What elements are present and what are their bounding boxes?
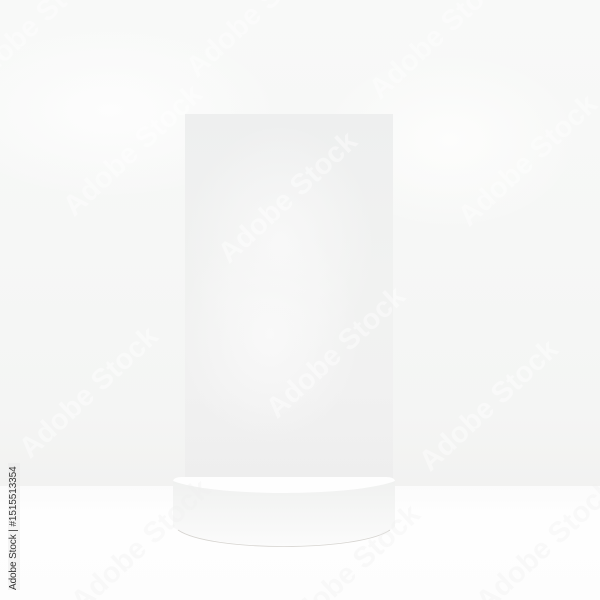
watermarks: Adobe Stock [212, 125, 364, 270]
stock id caption: Adobe Stock | #1515513354 [8, 466, 19, 590]
watermarks: Adobe Stock [413, 333, 565, 478]
watermarks: Adobe Stock [57, 78, 209, 223]
podium side [173, 481, 395, 546]
watermarks: Adobe Stock [260, 280, 412, 425]
floor [0, 486, 600, 600]
watermarks: Adobe Stock [452, 88, 600, 233]
blank display panel [185, 114, 393, 482]
watermarks: Adobe Stock [13, 320, 165, 465]
podium top [173, 477, 395, 493]
